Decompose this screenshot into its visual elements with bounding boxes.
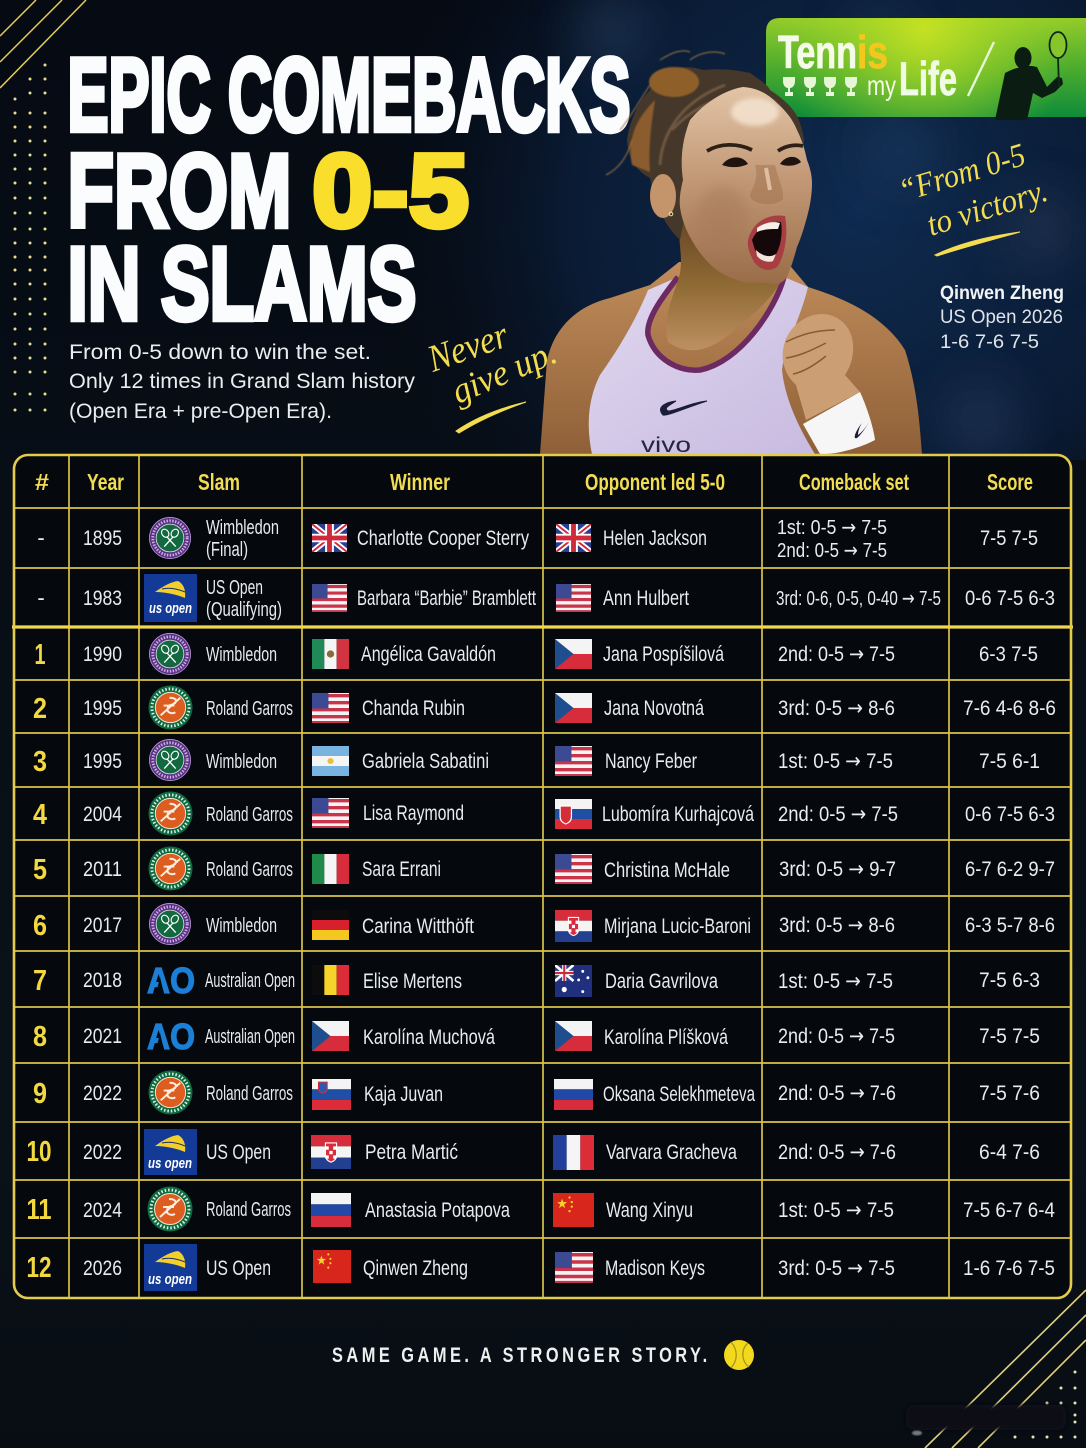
row 12: 2026 US Open: US Open bbox=[206, 1257, 271, 1280]
row 12: 2026 US Open: 1-6 7-6 7-5 bbox=[963, 1257, 1055, 1280]
icon: tennis ball bbox=[724, 1340, 754, 1370]
row 6: 2017 Wimbledon: 2017 bbox=[83, 914, 122, 937]
row 11: 2024 Roland Garros: Roland Garros bbox=[206, 1199, 291, 1221]
row 7: 2018 Australian Open: 2018 bbox=[83, 969, 122, 992]
decoration: top-left diagonal lines bbox=[0, 0, 86, 88]
nike swoosh on wristband bbox=[855, 420, 870, 438]
row: 1983 US Open qualifying: - bbox=[37, 585, 45, 610]
logo wordmark: is: is bbox=[857, 26, 888, 78]
table panel bbox=[12, 455, 1073, 1298]
slam logo: US Open: us open bbox=[148, 1271, 192, 1288]
slam logo: Wimbledon bbox=[149, 633, 191, 675]
row 9: 2022 Roland Garros: Roland Garros bbox=[206, 1083, 293, 1105]
table header: Opponent led 5-0 bbox=[585, 469, 725, 495]
row 12: 2026 US Open: 12 bbox=[26, 1252, 52, 1284]
row 5: 2011 Roland Garros: 2011 bbox=[83, 858, 122, 881]
row 8: 2021 Australian Open: Australian Open bbox=[205, 1026, 295, 1048]
row 9: 2022 Roland Garros: Kaja Juvan bbox=[364, 1083, 443, 1106]
row 9: 2022 Roland Garros: 9 bbox=[33, 1078, 47, 1110]
slam logo: US Open bbox=[144, 1244, 197, 1291]
row 3: 1995 Wimbledon: Nancy Feber bbox=[605, 750, 697, 773]
row 10: 2022 US Open: 6-4 7-6 bbox=[979, 1141, 1040, 1164]
row 7: 2018 Australian Open bbox=[33, 960, 1040, 1001]
row: 1983 US Open qualifying bbox=[37, 574, 1055, 622]
row 11: 2024 Roland Garros: 11 bbox=[26, 1194, 52, 1226]
title line 2: FROM bbox=[68, 134, 292, 250]
slam logo: Roland Garros bbox=[148, 846, 193, 891]
row 10: 2022 US Open: 2nd: 0-5 → 7-6 bbox=[778, 1140, 896, 1164]
title line 3: IN SLAMS bbox=[68, 226, 416, 342]
row 7: 2018 Australian Open: Elise Mertens bbox=[363, 970, 462, 993]
row 1: 1990 Wimbledon: 1990 bbox=[83, 643, 122, 666]
row 9: 2022 Roland Garros: 2022 bbox=[83, 1082, 122, 1105]
handwritten quote: From 0-5 to victory bbox=[895, 137, 1052, 256]
decoration: bottom-right diagonal lines and dots bbox=[906, 1290, 1086, 1448]
row: 1983 US Open qualifying: US Open bbox=[206, 577, 263, 599]
row: 1983 US Open qualifying: 3rd: 0-6, 0-5, 0-40 → 7-5 bbox=[776, 586, 941, 610]
row 10: 2022 US Open: 2022 bbox=[83, 1141, 122, 1164]
handwritten note: Never give up: give up. bbox=[445, 332, 562, 411]
flag: China bbox=[553, 1193, 594, 1227]
flag: United States bbox=[555, 854, 592, 884]
row 10: 2022 US Open: US Open bbox=[206, 1141, 271, 1164]
row 5: 2011 Roland Garros: 6-7 6-2 9-7 bbox=[965, 858, 1055, 881]
fist finger lines bbox=[786, 330, 835, 374]
flag: Russia bbox=[554, 1079, 593, 1110]
table header: Year bbox=[87, 469, 124, 495]
slam logo: US Open: us open bbox=[149, 600, 192, 617]
flag: Australia bbox=[555, 965, 592, 997]
ear bbox=[650, 174, 676, 218]
row 2: 1995 Roland Garros: 3rd: 0-5 → 8-6 bbox=[778, 696, 895, 720]
row: 1895 Wimbledon final: - bbox=[37, 525, 45, 550]
row 4: 2004 Roland Garros: 2nd: 0-5 → 7-5 bbox=[778, 802, 898, 826]
row: 1895 Wimbledon final: Charlotte Cooper Sterry bbox=[357, 527, 529, 550]
caption: player and match: 1-6 7-6 7-5 bbox=[940, 332, 1039, 353]
row 1: 1990 Wimbledon: Angélica Gavaldón bbox=[361, 643, 496, 666]
flag: Croatia bbox=[555, 910, 592, 942]
flag: United Kingdom bbox=[556, 524, 591, 552]
row 3: 1995 Wimbledon: 3 bbox=[33, 746, 47, 778]
flag: Argentina bbox=[312, 746, 349, 776]
row 4: 2004 Roland Garros: Roland Garros bbox=[206, 804, 293, 826]
table header bbox=[35, 469, 1033, 495]
logo: slash bbox=[968, 42, 994, 96]
row 2: 1995 Roland Garros: Roland Garros bbox=[206, 698, 293, 720]
caption: player and match: US Open 2026 bbox=[940, 307, 1063, 328]
subtitle text block bbox=[69, 340, 415, 423]
eyebrows bbox=[707, 145, 803, 151]
flag: Mexico bbox=[312, 639, 349, 669]
row 11: 2024 Roland Garros: Wang Xinyu bbox=[606, 1199, 693, 1222]
slam logo: Australian Open: AO bbox=[147, 1016, 195, 1057]
caption: player and match: Qinwen Zheng bbox=[940, 283, 1064, 304]
row 8: 2021 Australian Open: 7-5 7-5 bbox=[979, 1025, 1040, 1048]
slam logo: Wimbledon bbox=[149, 903, 191, 945]
slam logo: US Open: us open bbox=[148, 1155, 192, 1172]
row 7: 2018 Australian Open: 7 bbox=[33, 965, 47, 997]
row 11: 2024 Roland Garros: Anastasia Potapova bbox=[365, 1199, 510, 1222]
flag: United States bbox=[555, 746, 592, 776]
row 6: 2017 Wimbledon: 6-3 5-7 8-6 bbox=[965, 914, 1055, 937]
row 2: 1995 Roland Garros: 2 bbox=[33, 693, 47, 725]
row 6: 2017 Wimbledon: 6 bbox=[33, 910, 47, 942]
table header: Comeback set bbox=[799, 469, 909, 495]
row 12: 2026 US Open: Madison Keys bbox=[605, 1257, 705, 1280]
row 5: 2011 Roland Garros: Sara Errani bbox=[362, 858, 441, 881]
row 12: 2026 US Open bbox=[26, 1244, 1055, 1291]
row 7: 2018 Australian Open: 1st: 0-5 → 7-5 bbox=[778, 969, 893, 993]
flag: United States bbox=[556, 584, 591, 612]
slam logo: Australian Open: AO bbox=[147, 960, 195, 1001]
flag: Russia bbox=[311, 1193, 351, 1227]
face bbox=[680, 87, 812, 284]
row 2: 1995 Roland Garros: Jana Novotná bbox=[604, 697, 704, 720]
subtitle text block: From 0-5 down to win the set. bbox=[69, 340, 371, 364]
slam logo: Roland Garros bbox=[148, 685, 193, 730]
flag: Czechia bbox=[555, 639, 592, 669]
flag: United States bbox=[312, 693, 349, 723]
vivo logo text: vivo bbox=[641, 434, 691, 457]
row 3: 1995 Wimbledon: 1st: 0-5 → 7-5 bbox=[778, 749, 893, 773]
flag: Belgium bbox=[312, 965, 349, 995]
row 4: 2004 Roland Garros: Lubomíra Kurhajcová bbox=[602, 803, 754, 826]
row 4: 2004 Roland Garros: 4 bbox=[33, 799, 47, 831]
row: 1983 US Open qualifying: (Qualifying) bbox=[206, 599, 282, 621]
row: 1895 Wimbledon final: Wimbledon bbox=[206, 517, 279, 539]
row: 1895 Wimbledon final: 1st: 0-5 → 7-5 bbox=[777, 515, 887, 539]
row 8: 2021 Australian Open: 8 bbox=[33, 1021, 47, 1053]
eyes bbox=[722, 157, 801, 167]
flag: Czechia bbox=[312, 1021, 349, 1051]
row 5: 2011 Roland Garros: 3rd: 0-5 → 9-7 bbox=[779, 857, 896, 881]
row 10: 2022 US Open: 10 bbox=[26, 1136, 52, 1168]
row 4: 2004 Roland Garros bbox=[33, 791, 1055, 836]
flag: United States bbox=[555, 1252, 593, 1283]
row 11: 2024 Roland Garros: 7-5 6-7 6-4 bbox=[963, 1199, 1055, 1222]
table header: # bbox=[35, 469, 49, 495]
subtitle text block: Only 12 times in Grand Slam history bbox=[69, 369, 415, 393]
row 4: 2004 Roland Garros: 0-6 7-5 6-3 bbox=[965, 803, 1055, 826]
row 6: 2017 Wimbledon: 3rd: 0-5 → 8-6 bbox=[779, 913, 895, 937]
logo: trophies bbox=[783, 77, 857, 96]
row 8: 2021 Australian Open bbox=[33, 1016, 1040, 1057]
neck bbox=[666, 205, 787, 350]
wristband bbox=[803, 392, 875, 454]
row 8: 2021 Australian Open: Karolína Plíšková bbox=[604, 1026, 728, 1049]
row 2: 1995 Roland Garros: 7-6 4-6 8-6 bbox=[963, 697, 1056, 720]
slam logo: Roland Garros bbox=[148, 1186, 192, 1232]
flag: Czechia bbox=[555, 1021, 592, 1051]
row 3: 1995 Wimbledon: 7-5 6-1 bbox=[979, 750, 1040, 773]
slam logo: US Open bbox=[144, 1129, 197, 1175]
row 9: 2022 Roland Garros bbox=[33, 1070, 1040, 1115]
earring bbox=[669, 212, 673, 216]
slam logo: Roland Garros bbox=[148, 791, 193, 836]
flag: Italy bbox=[312, 854, 349, 884]
row 6: 2017 Wimbledon: Wimbledon bbox=[206, 915, 277, 937]
flag: United States bbox=[312, 798, 349, 828]
flag: Croatia bbox=[311, 1135, 351, 1169]
slam logo: Wimbledon bbox=[149, 517, 191, 559]
row 3: 1995 Wimbledon: 1995 bbox=[83, 750, 122, 773]
row 11: 2024 Roland Garros: 1st: 0-5 → 7-5 bbox=[778, 1198, 894, 1222]
row 1: 1990 Wimbledon bbox=[34, 633, 1038, 675]
row 5: 2011 Roland Garros bbox=[33, 846, 1055, 891]
row 2: 1995 Roland Garros bbox=[33, 685, 1056, 730]
row 7: 2018 Australian Open: Daria Gavrilova bbox=[605, 970, 718, 993]
row 10: 2022 US Open bbox=[26, 1129, 1040, 1175]
flag: Germany bbox=[312, 910, 349, 940]
row: 1983 US Open qualifying: Barbara “Barbie” Bramblett bbox=[357, 587, 536, 610]
row: 1983 US Open qualifying: Ann Hulbert bbox=[603, 587, 689, 610]
row 9: 2022 Roland Garros: Oksana Selekhmeteva bbox=[603, 1083, 755, 1106]
caption: player and match bbox=[940, 283, 1064, 353]
title line 1: EPIC COMEBACKS bbox=[68, 38, 630, 154]
flag: Slovakia bbox=[555, 799, 592, 829]
flag: France bbox=[553, 1135, 594, 1170]
tank top bbox=[589, 277, 815, 454]
row: 1895 Wimbledon final: (Final) bbox=[206, 539, 248, 561]
row 11: 2024 Roland Garros: 2024 bbox=[83, 1199, 122, 1222]
row 6: 2017 Wimbledon bbox=[33, 903, 1055, 945]
forearm and clenched fist bbox=[783, 314, 860, 420]
row 12: 2026 US Open: 3rd: 0-5 → 7-5 bbox=[778, 1256, 895, 1280]
row: 1983 US Open qualifying: 1983 bbox=[83, 587, 122, 610]
handwritten quote: From 0-5 to victory: “From 0-5 bbox=[895, 137, 1030, 210]
nose bbox=[750, 165, 783, 204]
table header: Score bbox=[987, 469, 1033, 495]
row 7: 2018 Australian Open: 7-5 6-3 bbox=[979, 969, 1040, 992]
row: 1895 Wimbledon final: Helen Jackson bbox=[603, 527, 707, 550]
row 8: 2021 Australian Open: 2nd: 0-5 → 7-5 bbox=[778, 1024, 895, 1048]
row 4: 2004 Roland Garros: 2004 bbox=[83, 803, 122, 826]
logo wordmark: Tenn: Tenn bbox=[778, 26, 857, 78]
row 5: 2011 Roland Garros: Roland Garros bbox=[206, 859, 293, 881]
row 3: 1995 Wimbledon: Wimbledon bbox=[206, 751, 277, 773]
row 8: 2021 Australian Open: 2021 bbox=[83, 1025, 122, 1048]
slam logo: Wimbledon bbox=[149, 739, 191, 781]
row 7: 2018 Australian Open: Australian Open bbox=[205, 970, 295, 992]
row 10: 2022 US Open: Petra Martić bbox=[365, 1141, 458, 1164]
row 6: 2017 Wimbledon: Carina Witthöft bbox=[362, 915, 474, 938]
row 3: 1995 Wimbledon: Gabriela Sabatini bbox=[362, 750, 489, 773]
flag: Slovenia bbox=[312, 1079, 351, 1110]
hair bbox=[606, 51, 804, 240]
row: 1895 Wimbledon final: 7-5 7-5 bbox=[980, 527, 1038, 550]
row 5: 2011 Roland Garros: 5 bbox=[33, 854, 47, 886]
row 1: 1990 Wimbledon: Wimbledon bbox=[206, 644, 277, 666]
table header: Slam bbox=[198, 469, 240, 495]
table header: Winner bbox=[390, 469, 450, 495]
handwritten quote: From 0-5 to victory: to victory. bbox=[923, 173, 1052, 244]
logo: Tennis is my Life bbox=[766, 18, 1086, 120]
row 10: 2022 US Open: Varvara Gracheva bbox=[606, 1141, 737, 1164]
neckline trim bbox=[648, 277, 784, 370]
flag: United Kingdom bbox=[312, 524, 347, 552]
decoration: dotted column top-left bbox=[14, 64, 46, 412]
title highlight: 0-5: 0-5 bbox=[312, 134, 469, 250]
subtitle text block: (Open Era + pre-Open Era). bbox=[69, 399, 332, 423]
row 11: 2024 Roland Garros bbox=[26, 1186, 1055, 1232]
row 2: 1995 Roland Garros: 1995 bbox=[83, 697, 122, 720]
row 8: 2021 Australian Open: Karolína Muchová bbox=[363, 1026, 495, 1049]
logo: player silhouette with racket bbox=[995, 32, 1066, 120]
row 4: 2004 Roland Garros: Lisa Raymond bbox=[363, 802, 464, 825]
row 12: 2026 US Open: Qinwen Zheng bbox=[363, 1257, 468, 1280]
row 1: 1990 Wimbledon: 2nd: 0-5 → 7-5 bbox=[778, 642, 895, 666]
forehead highlight bbox=[731, 98, 779, 126]
row 9: 2022 Roland Garros: 2nd: 0-5 → 7-6 bbox=[778, 1081, 896, 1105]
row 5: 2011 Roland Garros: Christina McHale bbox=[604, 859, 730, 882]
flag: United States bbox=[312, 584, 347, 612]
row 6: 2017 Wimbledon: Mirjana Lucic-Baroni bbox=[604, 915, 751, 938]
handwritten note: Never give up bbox=[421, 314, 562, 433]
flag: China bbox=[313, 1250, 351, 1283]
nike swoosh on shirt bbox=[660, 401, 707, 415]
title bbox=[68, 38, 630, 342]
mouth bbox=[748, 216, 786, 270]
handwritten note: Never give up: Never bbox=[421, 314, 514, 381]
row 1: 1990 Wimbledon: 6-3 7-5 bbox=[979, 643, 1038, 666]
row 3: 1995 Wimbledon bbox=[33, 739, 1040, 781]
row: 1895 Wimbledon final bbox=[37, 515, 1038, 562]
photo: Qinwen Zheng celebrating bbox=[540, 51, 922, 457]
logo wordmark: Life: Life bbox=[899, 52, 957, 105]
slam logo: Roland Garros bbox=[148, 1070, 193, 1115]
footer tagline: SAME GAME. A STRONGER STORY. bbox=[332, 1343, 707, 1366]
row: 1983 US Open qualifying: 0-6 7-5 6-3 bbox=[965, 587, 1055, 610]
cheek shadow bbox=[696, 186, 748, 250]
row: 1895 Wimbledon final: 1895 bbox=[83, 527, 122, 550]
row 2: 1995 Roland Garros: Chanda Rubin bbox=[362, 697, 465, 720]
torso and shoulders bbox=[540, 262, 922, 454]
flag: Czechia bbox=[555, 693, 592, 723]
row 1: 1990 Wimbledon: 1 bbox=[34, 639, 46, 671]
row 1: 1990 Wimbledon: Jana Pospíšilová bbox=[603, 643, 724, 666]
row: 1895 Wimbledon final: 2nd: 0-5 → 7-5 bbox=[777, 538, 887, 562]
row 12: 2026 US Open: 2026 bbox=[83, 1257, 122, 1280]
row 9: 2022 Roland Garros: 7-5 7-6 bbox=[979, 1082, 1040, 1105]
logo wordmark: my: my bbox=[867, 70, 896, 101]
slam logo: US Open bbox=[144, 574, 197, 622]
